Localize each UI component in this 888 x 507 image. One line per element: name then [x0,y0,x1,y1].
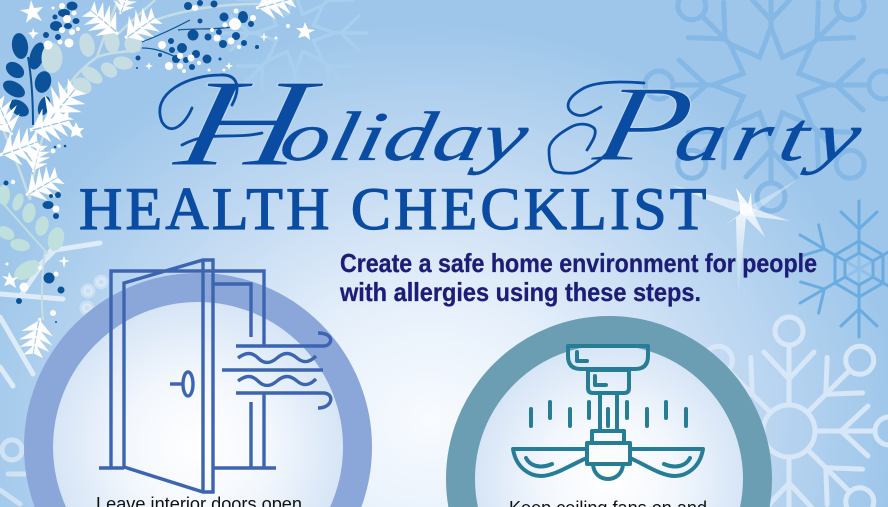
white sprigs [77,0,129,47]
snowflake: top right [645,0,888,211]
title: Holiday Party [160,54,886,193]
white berries [6,3,290,316]
dark berries [4,0,259,323]
mint leaves [0,185,67,284]
subtitle: with allergies using these steps. [339,277,701,307]
panel: open doors [38,260,358,507]
icon: open door with airflow [99,260,331,492]
pale stems [0,0,270,320]
pale leaves [42,30,143,98]
snowflake: bottom right [675,317,888,507]
title: Holiday Party: P [585,64,704,184]
title: Holiday Party: arty [669,98,877,176]
panel: ceiling fans [460,330,758,507]
wreath decoration [0,0,315,359]
circle ring [53,302,343,507]
icon: ceiling fan [513,346,703,479]
title: Holiday Party: oliday [274,98,536,176]
circle ring [475,345,743,507]
title: Health Checklist: HEALTH CHECKLIST [79,176,710,242]
sparkle star [671,180,797,300]
dark blue leaves [0,32,54,125]
title flourishes [160,75,644,173]
snowflake: top centre [223,0,367,105]
small white stars [2,0,315,288]
snowflake: right hexagon [791,201,888,337]
snowflake: left faded [0,240,106,504]
title: Holiday Party: H [164,54,331,193]
berry stems [142,20,232,58]
subtitle: Create a safe home environment for people [340,248,817,278]
